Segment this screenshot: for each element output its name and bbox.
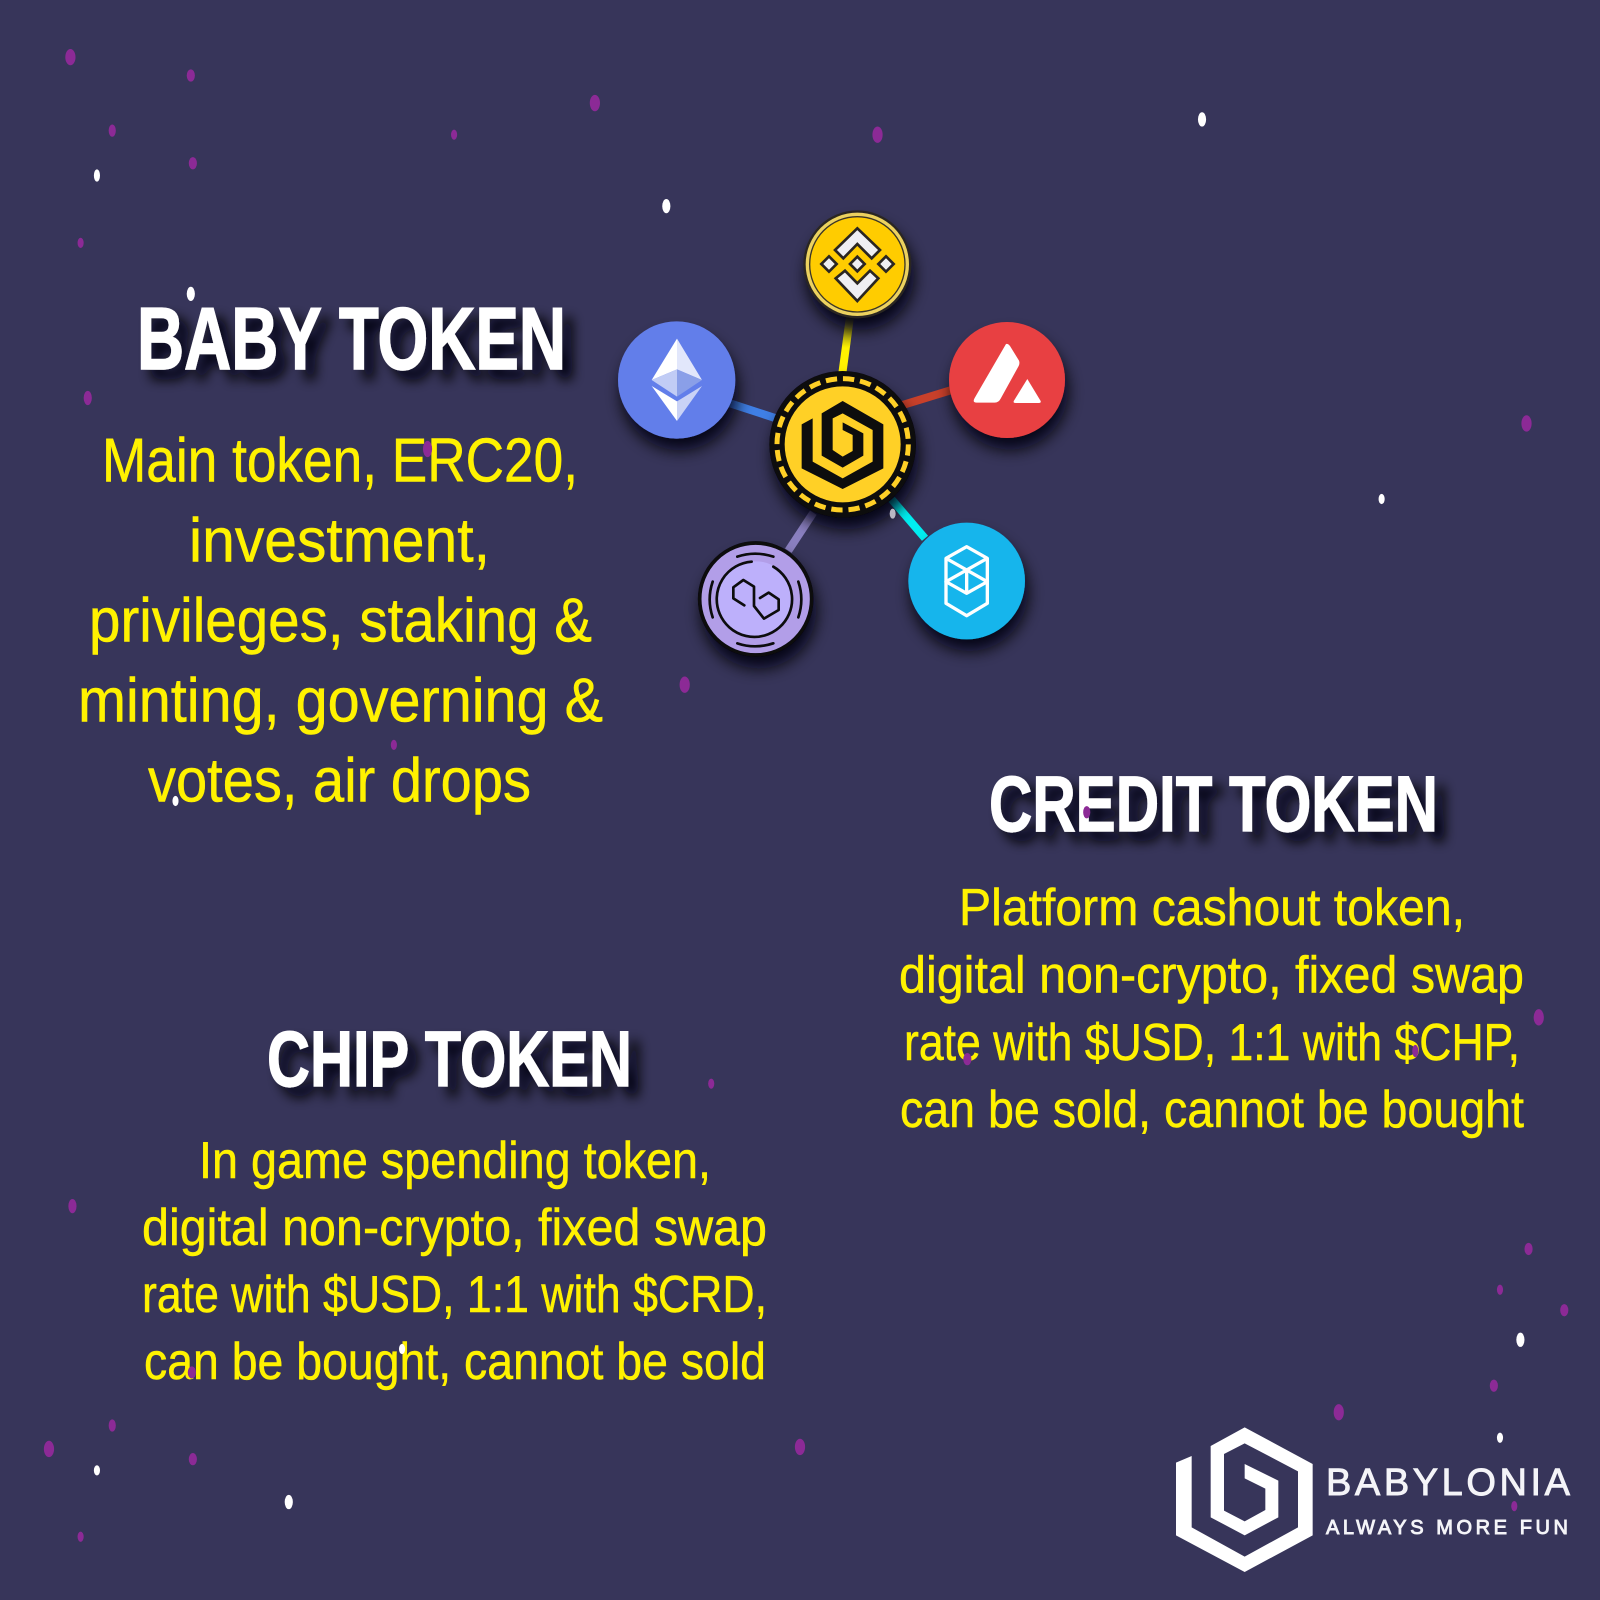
heading: chip token: CHIP TOKEN (267, 1014, 632, 1103)
background dots: white (94, 112, 1524, 1509)
icon: fantom coin (908, 523, 1025, 639)
connector: avalanche (903, 390, 952, 405)
text block: chip token description: rate with $USD, 1:1 with $CRD, (142, 1266, 767, 1324)
icon: babylonia center coin (769, 371, 916, 518)
text block: chip token description (142, 1132, 767, 1391)
icon: ethereum coin (618, 321, 735, 439)
text block: baby token description (78, 426, 603, 816)
logo mark (1176, 1427, 1313, 1572)
text block: credit token description (899, 879, 1524, 1139)
logo tagline: ALWAYS MORE FUN (1326, 1517, 1568, 1539)
heading: baby token: BABY TOKEN (137, 289, 566, 388)
text block: credit token description: Platform cashout token, (959, 879, 1465, 937)
heading: credit token: CREDIT TOKEN (989, 759, 1438, 848)
connector: ethereum (730, 403, 776, 418)
connector: binance (842, 317, 850, 373)
icon: polygon coin (700, 543, 812, 655)
logo wordmark: BABYLONIA (1326, 1462, 1571, 1504)
text block: baby token description: votes, air drops (148, 746, 531, 816)
text block: baby token description: Main token, ERC20, (102, 426, 578, 496)
small dot over fantom connector (890, 509, 896, 519)
text block: credit token description: can be sold, cannot be bought (900, 1081, 1524, 1139)
connector: polygon (788, 513, 813, 551)
logo: babylonia (1176, 1427, 1571, 1572)
text block: baby token description: investment, (189, 506, 490, 576)
text block: chip token description: can be bought, cannot be sold (144, 1333, 766, 1391)
text block: chip token description: digital non-crypto, fixed swap (142, 1199, 767, 1257)
connector: fantom (892, 499, 925, 538)
text block: chip token description: In game spending token, (199, 1132, 711, 1190)
text block: credit token description: digital non-crypto, fixed swap (899, 946, 1524, 1004)
icon: avalanche coin (949, 322, 1065, 438)
text block: baby token description: privileges, staking & (89, 586, 592, 656)
icon: binance coin (803, 210, 911, 318)
token network diagram (618, 210, 1065, 655)
text block: baby token description: minting, governing & (78, 666, 603, 736)
